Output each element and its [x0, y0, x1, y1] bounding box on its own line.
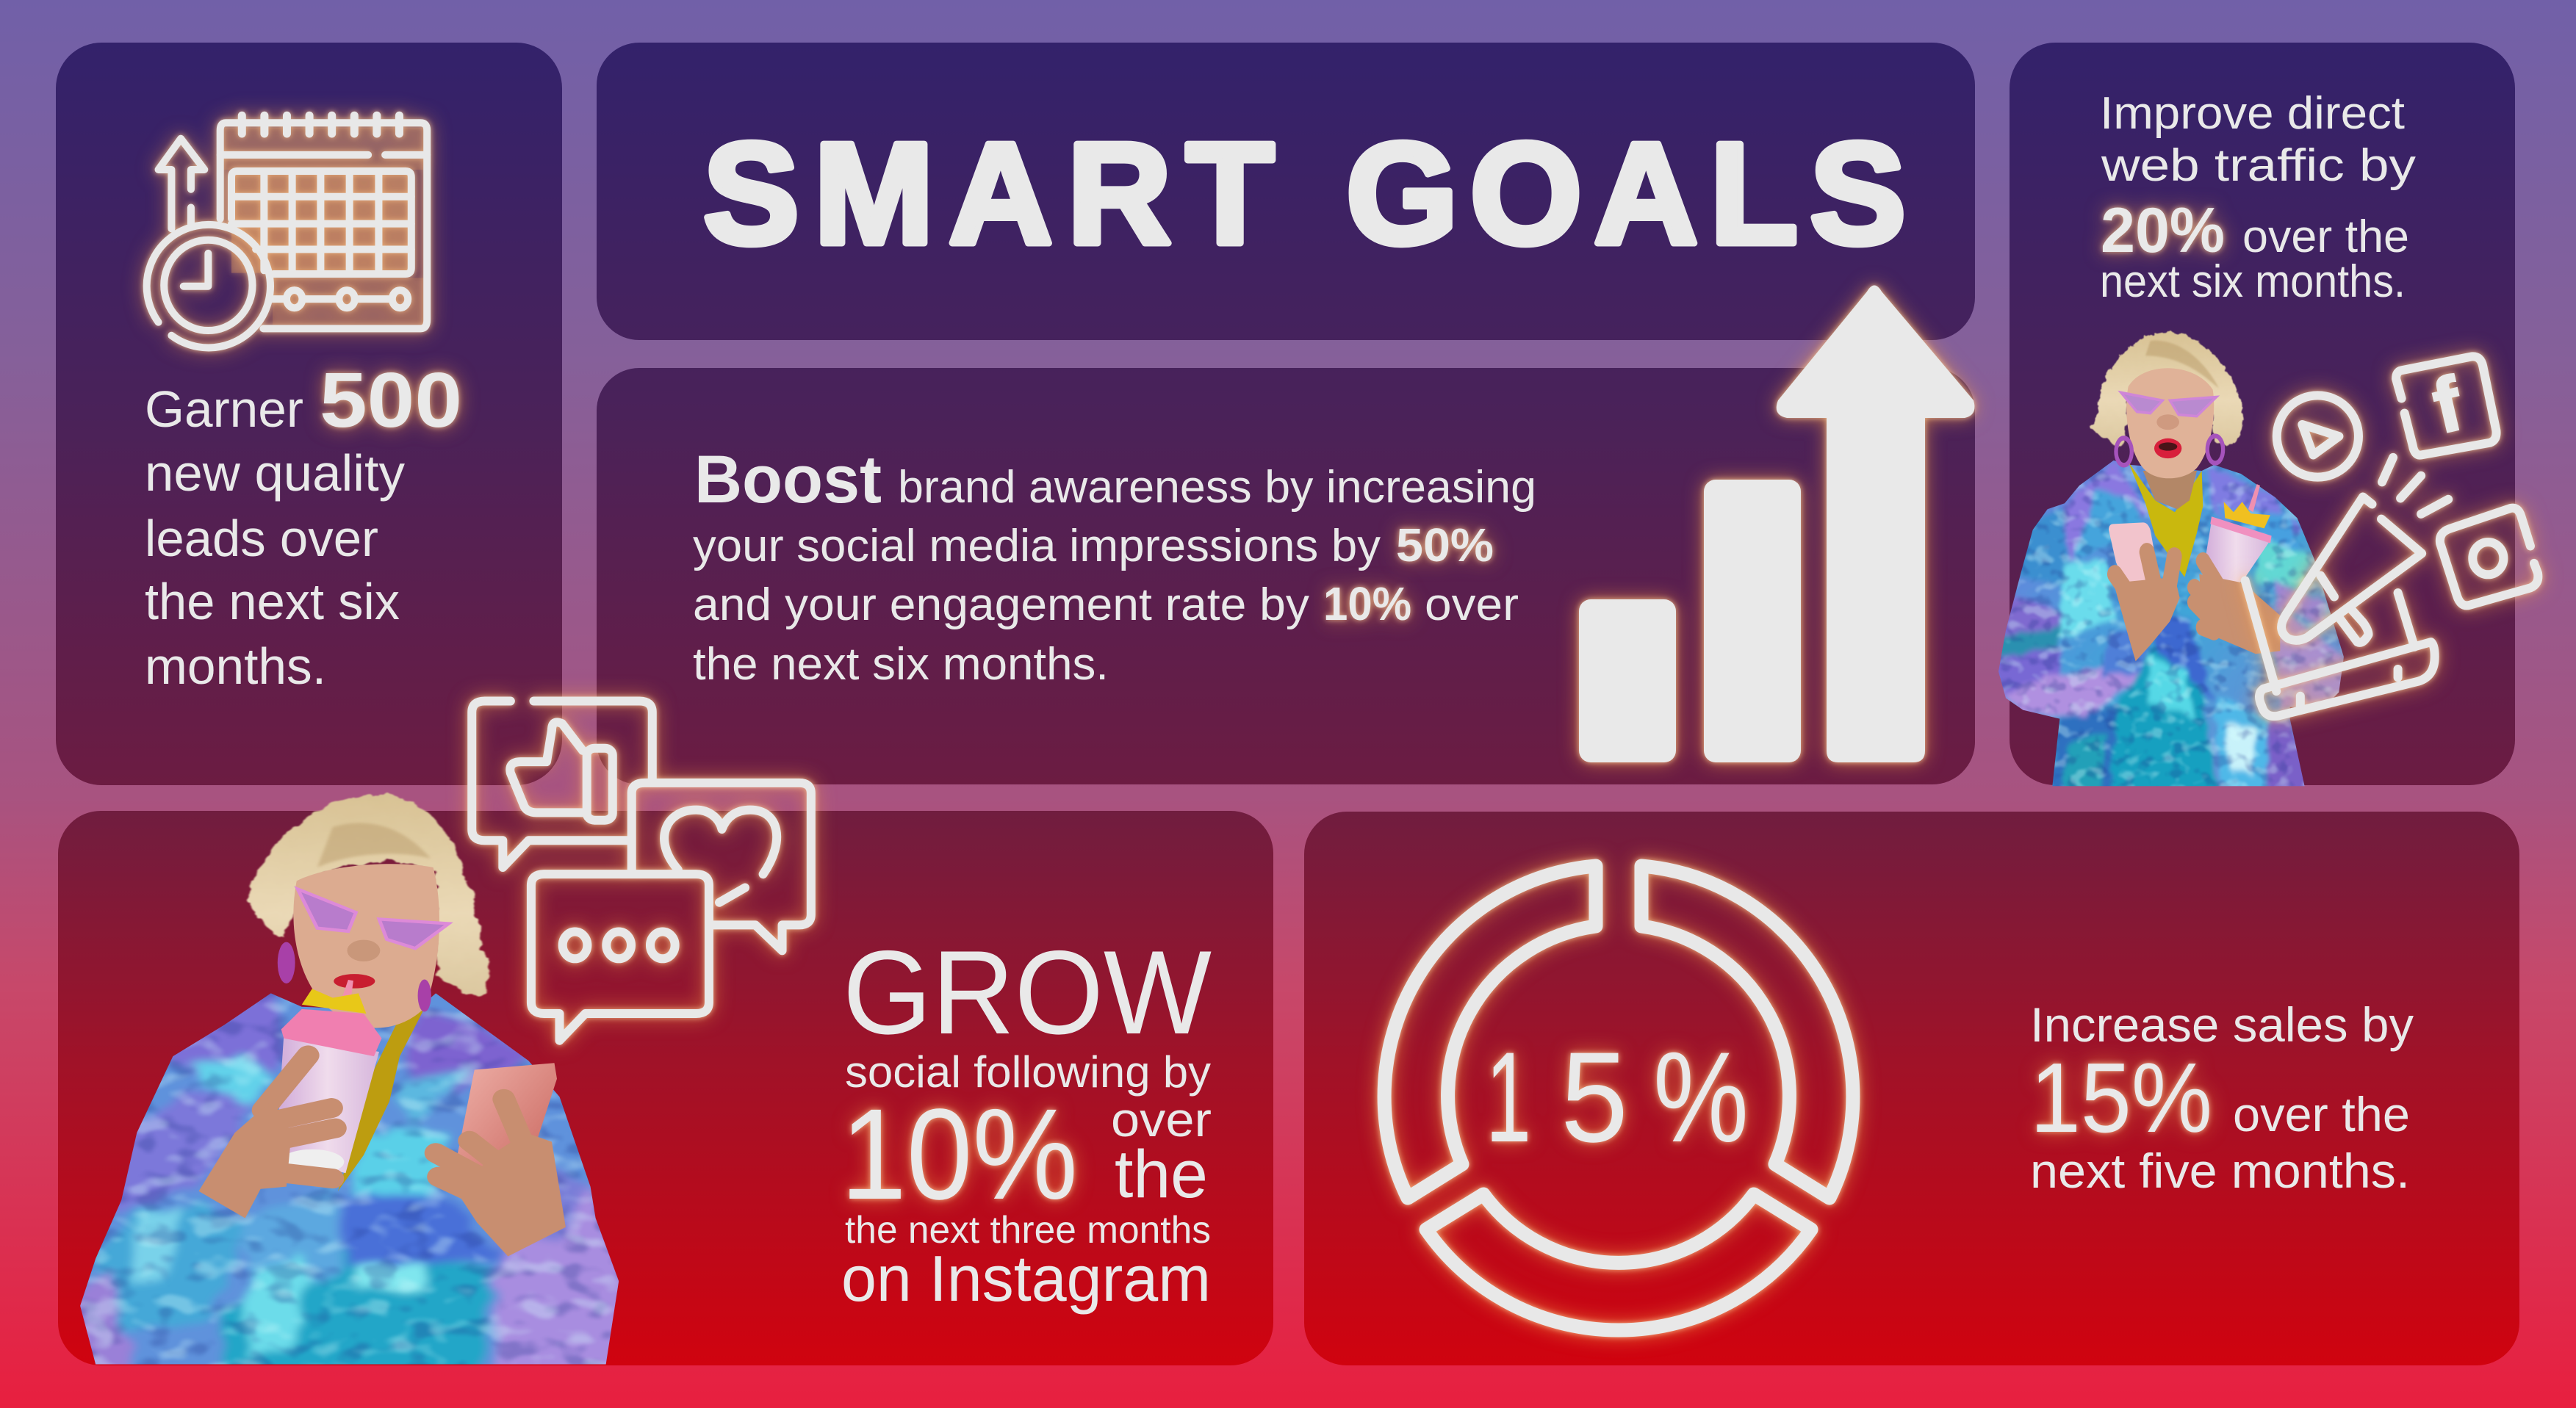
cup [2202, 484, 2272, 596]
text: increase sales: 15% [2030, 1042, 2212, 1153]
dots [563, 932, 675, 958]
instagram frame [2440, 508, 2538, 605]
heart bubble [632, 783, 811, 950]
hair shading [317, 823, 431, 867]
right hand [2195, 561, 2280, 654]
face [2126, 368, 2214, 478]
chart: donut ring with 15%: 5 [1561, 1026, 1628, 1169]
panel: increase sales [1304, 812, 2519, 1365]
text: grow social following [841, 926, 1212, 1315]
chart: rising bars with arrow [1579, 285, 1975, 762]
glasses [298, 889, 449, 948]
nose [347, 940, 380, 961]
chart: donut ring with 15%: 1 [1486, 1026, 1531, 1169]
text: grow social following: social following by [845, 1047, 1211, 1097]
text: garner 500 leads: 500 [320, 357, 462, 444]
text: increase sales [2030, 997, 2414, 1198]
text: improve web traffic: over the [2242, 212, 2409, 262]
text: garner 500 leads: Garner [145, 380, 303, 438]
left hand [2114, 552, 2180, 661]
text: grow social following: 10% [841, 1083, 1078, 1227]
text: garner 500 leads: months. [145, 638, 326, 695]
earrings [278, 942, 295, 983]
text: boost brand awareness: brand awareness by increasing [898, 462, 1536, 513]
icon: calendar with clock and arrow [147, 115, 427, 347]
comment bubble [531, 874, 709, 1041]
text: boost brand awareness: over [1425, 580, 1519, 630]
text: improve web traffic [2100, 88, 2416, 307]
text: boost brand awareness: and your engagement rate by [693, 580, 1309, 630]
phone [2109, 522, 2160, 596]
hair [2089, 332, 2243, 446]
text: grow social following: the [1115, 1137, 1208, 1212]
hair [248, 795, 489, 994]
mouth [2154, 438, 2181, 458]
heart [664, 810, 777, 903]
text: improve web traffic: next six months. [2100, 256, 2406, 307]
text: boost brand awareness: 10% [1323, 577, 1411, 630]
laptop [2245, 580, 2435, 716]
text: garner 500 leads [145, 357, 462, 695]
icon: social media megaphone [2245, 356, 2538, 716]
text: increase sales: over the [2233, 1087, 2410, 1141]
face [293, 864, 439, 1028]
text: grow social following: on Instagram [841, 1242, 1211, 1315]
glasses [2121, 392, 2217, 416]
text: garner 500 leads: the next six [145, 573, 400, 630]
text: improve web traffic: Improve direct [2100, 88, 2405, 139]
jacket [1998, 461, 2344, 786]
text: boost brand awareness [693, 442, 1536, 690]
text: garner 500 leads: leads over [145, 510, 378, 567]
jacket [80, 993, 619, 1365]
text: garner 500 leads: new quality [145, 444, 405, 502]
title: SMART [703, 113, 1274, 274]
shirt [2129, 462, 2203, 577]
chart: donut ring with 15% [1384, 866, 1853, 1330]
nose [2156, 414, 2179, 430]
like bubble [472, 701, 652, 867]
thumb [510, 722, 613, 820]
megaphone [2281, 497, 2422, 643]
icon: social media megaphone: f [2425, 361, 2469, 450]
text: improve web traffic: web traffic by [2101, 140, 2416, 191]
photo: surprised woman in holographic jacket [1974, 332, 2390, 825]
earring right [418, 979, 431, 1012]
chart: donut ring with 15%: % [1653, 1026, 1749, 1169]
panel: web traffic [2010, 43, 2515, 785]
title [703, 113, 1906, 274]
cup [276, 980, 381, 1174]
panel: boost brand awareness [597, 368, 1975, 784]
panel: grow following [58, 811, 1273, 1365]
play button [2277, 395, 2359, 477]
lips [334, 974, 375, 989]
text: boost brand awareness: your social media impressions by [693, 521, 1381, 571]
title: GOALS [1346, 113, 1906, 274]
earrings [2116, 436, 2223, 465]
text: boost brand awareness: Boost [694, 442, 882, 517]
rays [2382, 458, 2448, 514]
text: improve web traffic: 20% [2101, 195, 2225, 266]
panel: calendar leads [56, 43, 562, 785]
text: grow social following: over [1111, 1092, 1212, 1147]
hair shading [2145, 341, 2219, 388]
panel: title [597, 43, 1975, 340]
phone [456, 1063, 557, 1183]
neck [2143, 471, 2197, 509]
icon: like, heart and comment speech bubbles [472, 701, 811, 1041]
text: grow social following: the next three months [845, 1209, 1211, 1252]
left hand [198, 1055, 335, 1219]
text: boost brand awareness: 50% [1396, 519, 1494, 571]
text: grow social following: GROW [843, 926, 1212, 1059]
text: boost brand awareness: the next six months. [693, 639, 1109, 690]
right hand [436, 1099, 566, 1257]
text: increase sales: next five months. [2030, 1144, 2410, 1198]
facebook frame [2396, 356, 2497, 455]
text: increase sales: Increase sales by [2030, 997, 2414, 1052]
photo: woman sipping drink and holding phone [18, 795, 688, 1408]
shirt [338, 1007, 423, 1191]
